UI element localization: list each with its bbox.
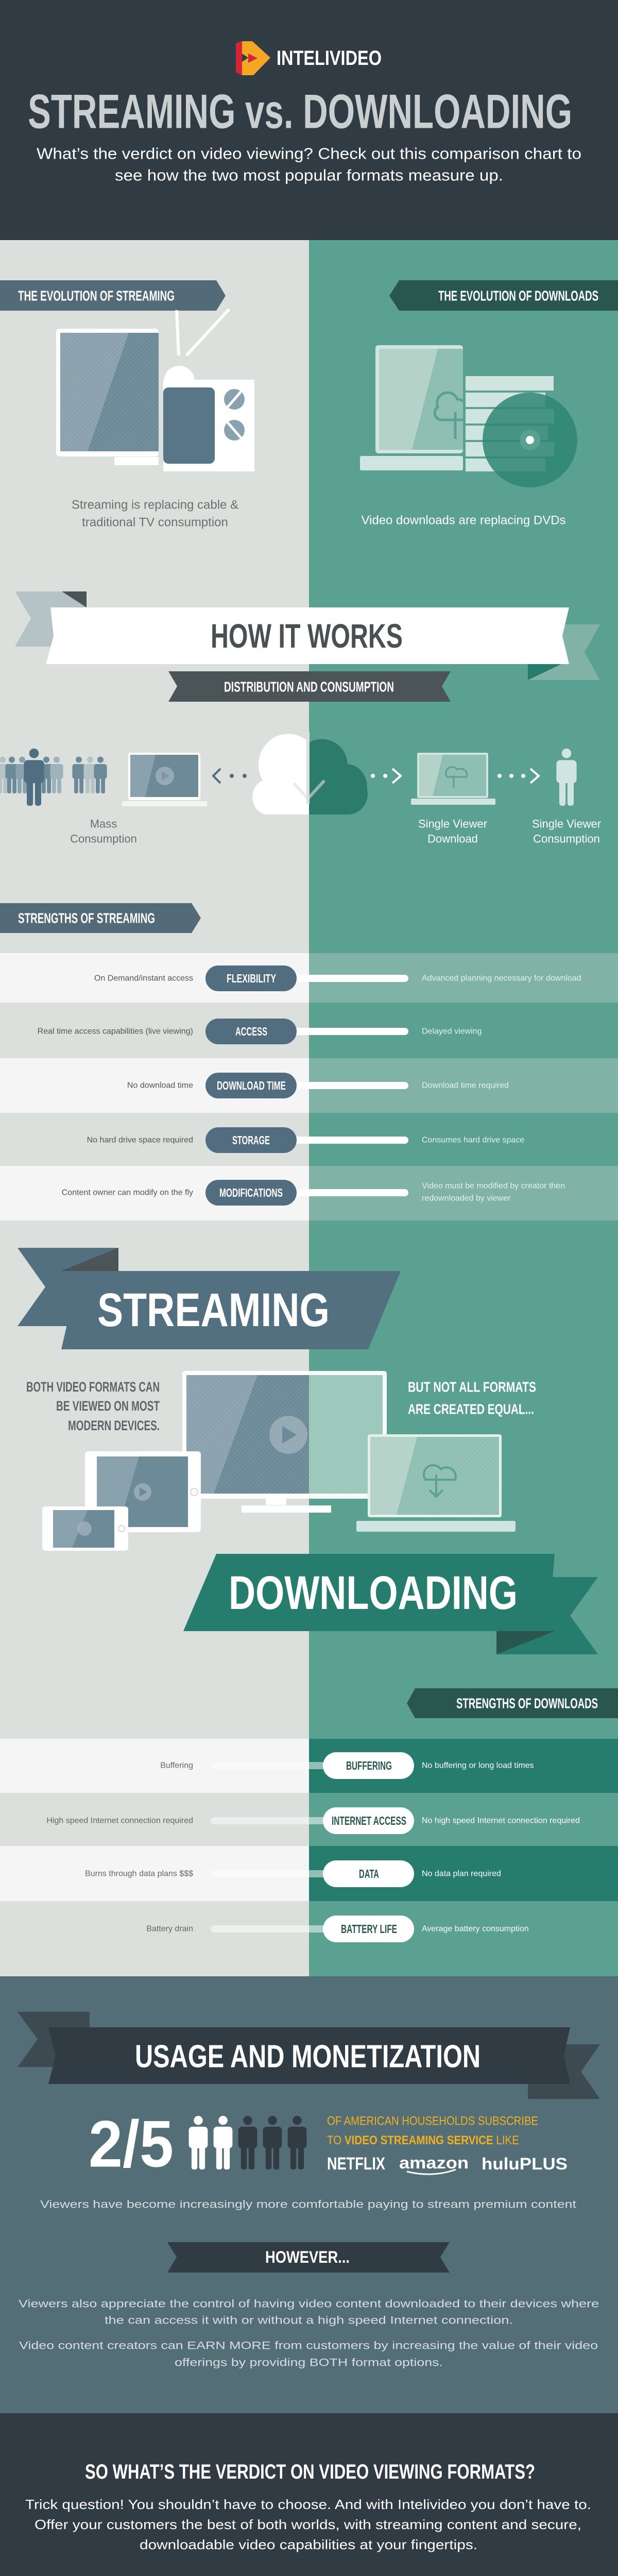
table: streaming strengths: MODIFICATIONS [219, 1186, 283, 1199]
arrow: laptop to single viewer [497, 769, 539, 783]
table: download strengths [0, 1739, 618, 1942]
label: single viewer download: Single Viewer [418, 817, 487, 831]
ribbon: downloading: DOWNLOADING [229, 1567, 518, 1619]
table: streaming strengths: No hard drive space required [87, 1136, 193, 1145]
table: streaming strengths: Advanced planning necessary for download [422, 974, 581, 983]
icon: devices [42, 1371, 516, 1551]
logos: streaming services: amazon [399, 2154, 469, 2172]
header logo [236, 41, 382, 75]
text: households subscribe [327, 2114, 538, 2147]
banner: strengths of streaming [0, 903, 201, 933]
logos: streaming services: huluPLUS [482, 2155, 568, 2173]
text: however paragraphs: offerings by providing BOTH format options. [175, 2357, 443, 2369]
ribbon: how it works [15, 591, 600, 680]
table: streaming strengths: No download time [127, 1081, 193, 1090]
label: single viewer download: Download [427, 833, 478, 845]
banner: evolution of downloads [389, 280, 618, 311]
subtitle: What’s the verdict on video viewing? Check out this comparison chart to [37, 144, 581, 163]
table: download strengths: No data plan required [422, 1869, 501, 1878]
header logo: INTELIVIDEO [277, 47, 382, 70]
text: households subscribe: OF AMERICAN HOUSEHOLDS SUBSCRIBE [327, 2114, 538, 2128]
icon: single viewer [556, 749, 577, 806]
ribbon: streaming [18, 1248, 401, 1349]
text: however paragraphs [19, 2298, 599, 2369]
icon: download laptop [411, 753, 495, 805]
caption: streaming evolution: Streaming is replacing cable & [72, 498, 238, 512]
text: households subscribe: TO VIDEO STREAMING SERVICE LIKE [327, 2133, 519, 2147]
ribbon: usage and monetization [18, 2012, 600, 2099]
table: streaming strengths: DOWNLOAD TIME [217, 1079, 286, 1092]
table: download strengths: No high speed Internet connection required [422, 1817, 580, 1825]
label: mass consumption: Consumption [70, 833, 137, 845]
table: download strengths: BATTERY LIFE [341, 1922, 397, 1936]
table: streaming strengths: Video must be modified by creator then [422, 1182, 565, 1190]
table: download strengths: Average battery consumption [422, 1925, 529, 1933]
table: download strengths: Burns through data plans $$$ [85, 1869, 193, 1878]
caption: streaming evolution [72, 498, 238, 530]
banner: evolution of streaming: THE EVOLUTION OF STREAMING [18, 287, 175, 304]
banner: evolution of streaming [0, 280, 226, 311]
label: single viewer consumption: Consumption [533, 833, 600, 845]
text: verdict paragraph: Trick question! You shouldn’t have to choose. And with Intelivideo you don’t have to. [25, 2497, 591, 2512]
table: download strengths: Buffering [160, 1761, 193, 1770]
table: streaming strengths: Consumes hard drive space [422, 1136, 524, 1145]
icon: cloud split [252, 732, 368, 815]
icon: laptop with cloud and dvd stack [360, 345, 577, 487]
text: both formats: BOTH VIDEO FORMATS CAN [26, 1379, 160, 1395]
text: however paragraphs: Viewers also appreciate the control of having video content downloaded to their devices where [19, 2298, 599, 2310]
table: streaming strengths: Delayed viewing [422, 1027, 482, 1036]
table: streaming strengths [0, 953, 618, 1221]
text: however paragraphs: the can access it with or without a high speed Internet connection. [105, 2314, 513, 2327]
label: mass consumption: Mass [90, 817, 117, 831]
ribbon: streaming: STREAMING [97, 1284, 330, 1336]
icon: mass consumption crowd [0, 749, 107, 806]
label: single viewer download [418, 817, 487, 845]
table: streaming strengths: Real time access capabilities (live viewing) [38, 1027, 193, 1036]
text: both formats: MODERN DEVICES. [68, 1418, 160, 1433]
icon: households people [189, 2116, 306, 2170]
text: viewers comfortable paying: Viewers have become increasingly more comfortable paying to stream premium content [40, 2199, 576, 2210]
ribbon: how it works: HOW IT WORKS [211, 617, 403, 655]
banner: strengths of streaming: STRENGTHS OF STREAMING [18, 910, 155, 926]
text: not all formats equal: ARE CREATED EQUAL... [408, 1401, 534, 1417]
table: streaming strengths: STORAGE [232, 1133, 270, 1147]
label: mass consumption [70, 817, 137, 845]
subtitle [37, 144, 581, 184]
caption: streaming evolution: traditional TV consumption [82, 515, 228, 530]
label: single viewer consumption [532, 817, 601, 845]
text: both formats: BE VIEWED ON MOST [56, 1398, 160, 1414]
text: verdict paragraph: Offer your customers the best of both worlds, with streaming content and secure, [35, 2517, 581, 2532]
table: download strengths: BUFFERING [346, 1759, 392, 1772]
banner: however: HOWEVER... [265, 2248, 350, 2266]
table: streaming strengths: ACCESS [235, 1025, 267, 1038]
table: download strengths: No buffering or long load times [422, 1761, 534, 1770]
logos: streaming services: NETFLIX [327, 2154, 385, 2174]
text: verdict paragraph [25, 2497, 591, 2552]
table: download strengths: DATA [359, 1867, 379, 1880]
caption: downloads evolution: Video downloads are replacing DVDs [361, 513, 566, 528]
icon: monitor and retro tv [56, 309, 254, 471]
table: download strengths: High speed Internet connection required [46, 1817, 193, 1825]
banner: distribution and consumption: DISTRIBUTION AND CONSUMPTION [224, 679, 394, 694]
table: streaming strengths: FLEXIBILITY [227, 972, 276, 985]
text: verdict paragraph: downloadable video capabilities at your fingertips. [140, 2537, 477, 2552]
arrow: left to streaming laptop [213, 769, 247, 783]
table: streaming strengths: Download time required [422, 1081, 509, 1090]
table: download strengths: Battery drain [146, 1925, 193, 1933]
banner: distribution and consumption [168, 671, 451, 702]
icon: streaming laptop [122, 753, 207, 806]
ribbon: usage and monetization: USAGE AND MONETIZATION [135, 2039, 480, 2074]
table: download strengths: INTERNET ACCESS [332, 1814, 406, 1827]
stat: 2/5: 2/5 [89, 2107, 174, 2181]
subtitle: see how the two most popular formats measure up. [115, 166, 503, 184]
text: however paragraphs: Video content creators can EARN MORE from customers by increasing the value of their video [19, 2340, 598, 2351]
table: streaming strengths: Content owner can modify on the fly [62, 1188, 193, 1197]
text: not all formats equal [408, 1379, 536, 1417]
label: single viewer consumption: Single Viewer [532, 817, 601, 831]
banner: however [167, 2242, 450, 2273]
arrow: cloud to download laptop [371, 769, 401, 783]
text: not all formats equal: BUT NOT ALL FORMATS [408, 1379, 536, 1395]
text: both formats [26, 1379, 160, 1433]
ribbon: downloading [183, 1554, 598, 1654]
logos: streaming services [327, 2154, 568, 2174]
banner: strengths of downloads [407, 1688, 618, 1718]
table: streaming strengths: redownloaded by viewer [422, 1194, 511, 1202]
table: streaming strengths: On Demand/instant access [94, 974, 193, 983]
